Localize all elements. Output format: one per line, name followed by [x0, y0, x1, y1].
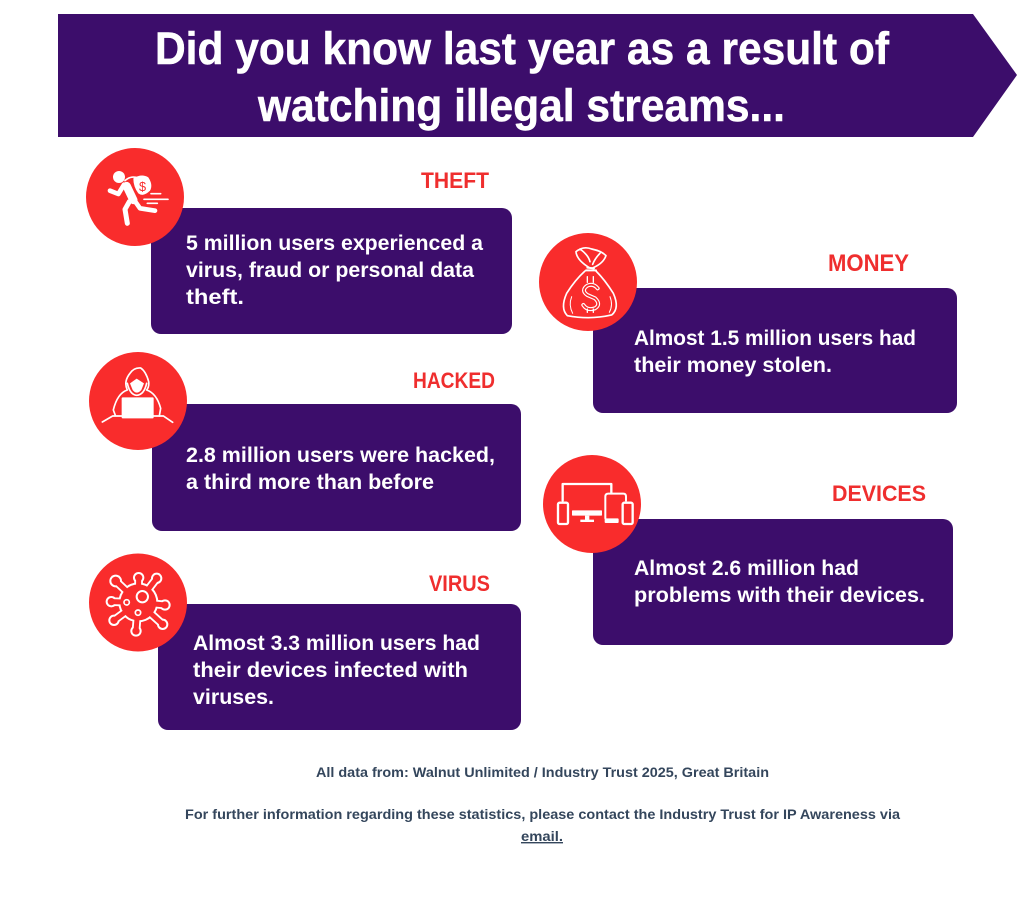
text: theft statistic — [186, 232, 483, 309]
heading: virus: VIRUS — [429, 571, 490, 596]
text: hacked statistic — [186, 444, 495, 494]
text: virus statistic: viruses. — [193, 686, 274, 709]
footer contact note: For further information regarding these statistics, please contact the Industry Trust for IP Awareness via — [185, 806, 900, 822]
text: money statistic: their money stolen. — [634, 354, 832, 377]
text: virus statistic: Almost 3.3 million users had — [193, 632, 480, 655]
icon: money bag — [539, 233, 637, 331]
text: devices statistic — [634, 557, 925, 607]
heading: theft: THEFT — [421, 168, 490, 193]
title banner: Did you know last year as a result of — [155, 23, 890, 74]
heading: money: MONEY — [828, 250, 909, 277]
panel: hacked — [89, 352, 521, 531]
footer contact note — [185, 806, 900, 844]
icon: thief running with money bag: $ — [139, 180, 146, 194]
icon: hooded hacker with laptop — [89, 352, 187, 450]
text: virus statistic: their devices infected with — [193, 659, 468, 682]
text: devices statistic: problems with their devices. — [634, 584, 925, 607]
panel: virus — [89, 554, 521, 730]
icon: phone, monitor and tablet — [543, 455, 641, 553]
panel: theft — [86, 148, 512, 334]
footer source note: All data from: Walnut Unlimited / Industry Trust 2025, Great Britain — [316, 764, 769, 780]
icon: thief running with money bag — [86, 148, 184, 246]
text: money statistic — [634, 327, 916, 377]
title banner — [58, 14, 1017, 137]
text: theft statistic: virus, fraud or personal data — [186, 259, 474, 282]
text: virus statistic — [193, 632, 480, 709]
text: theft statistic: 5 million users experienced a — [186, 232, 483, 255]
text: theft statistic: theft. — [186, 286, 244, 309]
title banner: watching illegal streams... — [257, 80, 785, 131]
text: devices statistic: Almost 2.6 million had — [634, 557, 859, 580]
footer contact note: email. — [521, 828, 563, 844]
panel: money — [539, 233, 957, 413]
heading: devices: DEVICES — [832, 481, 926, 506]
text: hacked statistic: 2.8 million users were hacked, — [186, 444, 495, 467]
icon: virus — [89, 554, 187, 652]
panel: devices — [543, 455, 953, 645]
heading: hacked: HACKED — [413, 368, 495, 393]
text: hacked statistic: a third more than before — [186, 471, 434, 494]
text: money statistic: Almost 1.5 million users had — [634, 327, 916, 350]
